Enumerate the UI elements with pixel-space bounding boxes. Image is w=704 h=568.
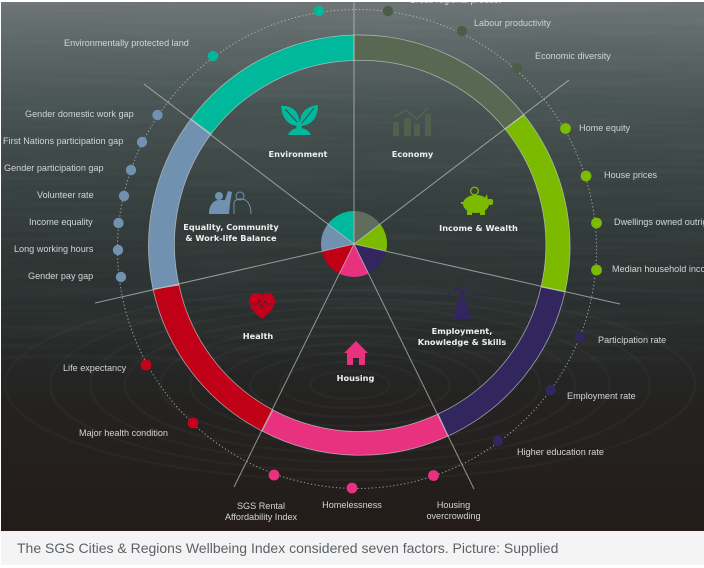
icon: two people (equality): [209, 191, 251, 214]
labels: employment indicators: Participation rate: [598, 335, 666, 345]
labels: environment indicators: Environmentally protected land: [64, 38, 189, 48]
labels: economy indicators: Economic diversity: [535, 51, 611, 61]
icon: chart (economy): [393, 108, 431, 136]
labels: equality indicators: First Nations participation gap: [3, 136, 123, 146]
category titles: Knowledge & Skills: [418, 337, 506, 347]
radial divider lines: [95, 0, 620, 489]
labels: housing indicators: SGS Rental: [237, 501, 285, 511]
labels: economy indicators: [409, 0, 611, 61]
caption bar: The SGS Cities & Regions Wellbeing Index considered seven factors. Picture: Supplied: [17, 540, 558, 556]
category titles: [183, 149, 518, 383]
labels: equality indicators: Volunteer rate: [37, 190, 94, 200]
labels: equality indicators: Gender pay gap: [28, 271, 93, 281]
labels: income and wealth indicators: Home equity: [579, 123, 631, 133]
labels: housing indicators: Housing: [437, 500, 470, 510]
labels: equality indicators: [3, 109, 134, 281]
ring segment: health: [153, 285, 273, 431]
labels: health indicators: [63, 363, 168, 438]
icon: plant (environment): [281, 105, 318, 135]
icon: piggy bank (income and wealth): [461, 187, 493, 215]
indicator dots: [113, 6, 602, 493]
icon: house (housing): [344, 341, 368, 365]
centre pie: [321, 211, 387, 277]
labels: housing indicators: Homelessness: [322, 500, 382, 510]
labels: equality indicators: Long working hours: [14, 244, 94, 254]
labels: equality indicators: Income equality: [29, 217, 93, 227]
ring segment: housing: [262, 410, 448, 455]
category titles: Employment,: [432, 326, 492, 336]
ring segment: environment: [191, 35, 354, 134]
labels: economy indicators: Labour productivity: [474, 18, 551, 28]
ring segment: economy: [354, 35, 524, 129]
labels: employment indicators: Higher education rate: [517, 447, 604, 457]
category titles: Housing: [337, 373, 374, 383]
category titles: Health: [243, 331, 273, 341]
caption bar: [1, 531, 704, 565]
category titles: Environment: [269, 149, 328, 159]
labels: housing indicators: [225, 500, 481, 522]
ring segment: income and wealth: [505, 115, 570, 292]
category titles: Economy: [392, 149, 434, 159]
labels: employment indicators: Employment rate: [567, 391, 636, 401]
labels: income and wealth indicators: [579, 123, 704, 274]
icon: person with network (employment): [448, 287, 478, 319]
labels: housing indicators: Affordability Index: [225, 512, 298, 522]
category titles: Income & Wealth: [439, 223, 518, 233]
labels: health indicators: Life expectancy: [63, 363, 127, 373]
labels: equality indicators: Gender participation gap: [4, 163, 104, 173]
labels: health indicators: Major health condition: [79, 428, 168, 438]
ring segment: employment: [438, 287, 565, 436]
main segmented ring: [149, 35, 570, 455]
ring segment: equality: [149, 119, 211, 289]
dotted outer ring: [118, 10, 596, 488]
labels: equality indicators: Gender domestic work gap: [25, 109, 134, 119]
category titles: Equality, Community: [183, 222, 279, 232]
category titles: & Work-life Balance: [185, 233, 277, 243]
labels: employment indicators: [517, 335, 666, 457]
icon: heart with pulse (health): [249, 293, 275, 319]
labels: housing indicators: overcrowding: [426, 511, 481, 521]
labels: income and wealth indicators: House prices: [604, 170, 658, 180]
